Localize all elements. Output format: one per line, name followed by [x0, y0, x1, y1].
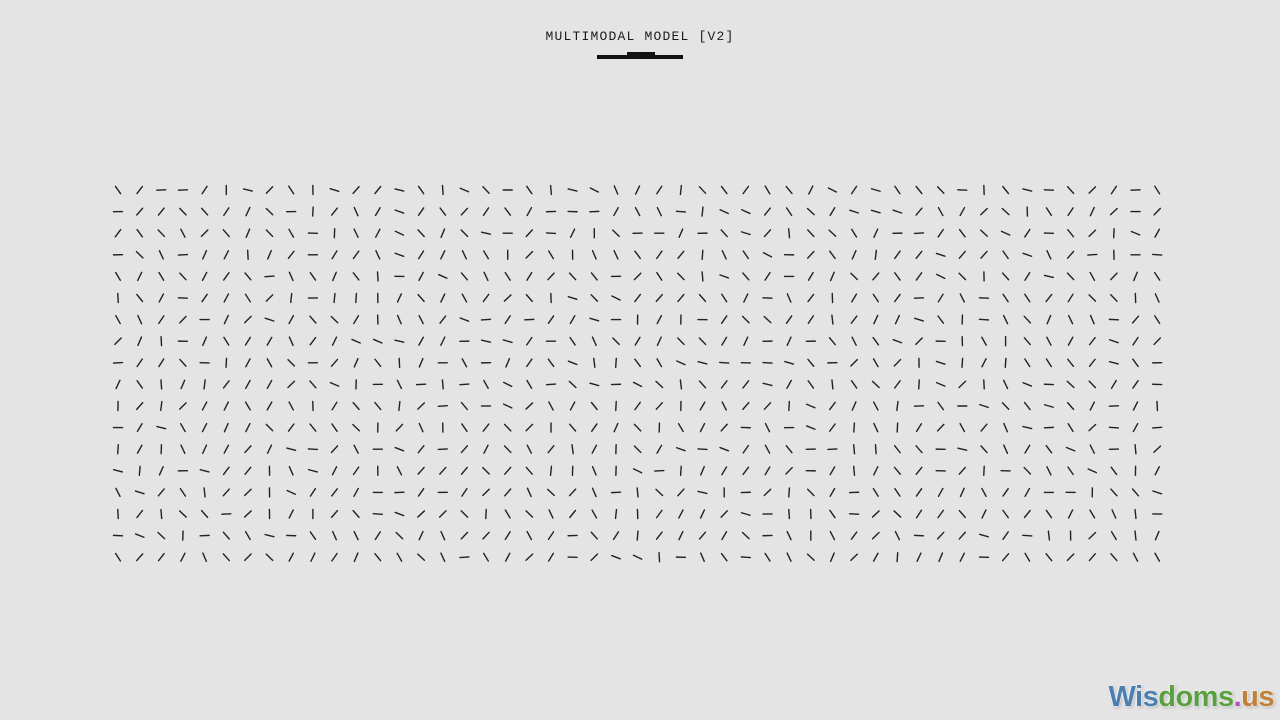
title: MULTIMODAL MODEL [V2] [545, 29, 735, 44]
watermark: Wisdoms.us [1108, 681, 1274, 713]
title underline [597, 55, 683, 59]
